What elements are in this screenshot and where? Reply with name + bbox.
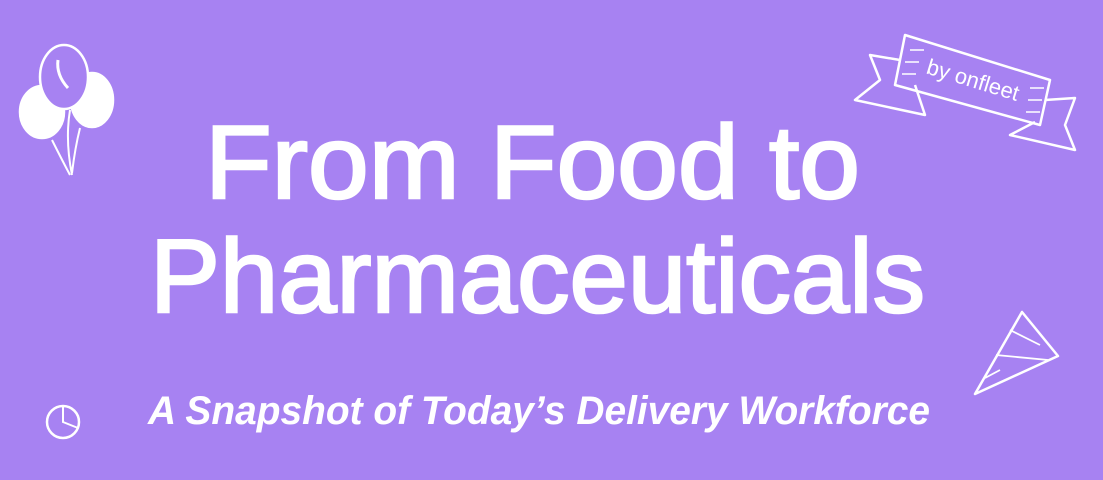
icon: small circle	[47, 406, 79, 438]
icon: balloons	[20, 45, 113, 175]
title	[150, 105, 925, 335]
icon: banner by onfleet: by onfleet	[924, 54, 1022, 106]
title: Pharmaceuticals	[150, 219, 925, 335]
title: From Food to	[205, 105, 860, 221]
icon: party hat	[975, 312, 1058, 394]
icon: banner by onfleet	[855, 35, 1075, 150]
subtitle: A Snapshot of Today’s Delivery Workforce	[147, 389, 930, 433]
